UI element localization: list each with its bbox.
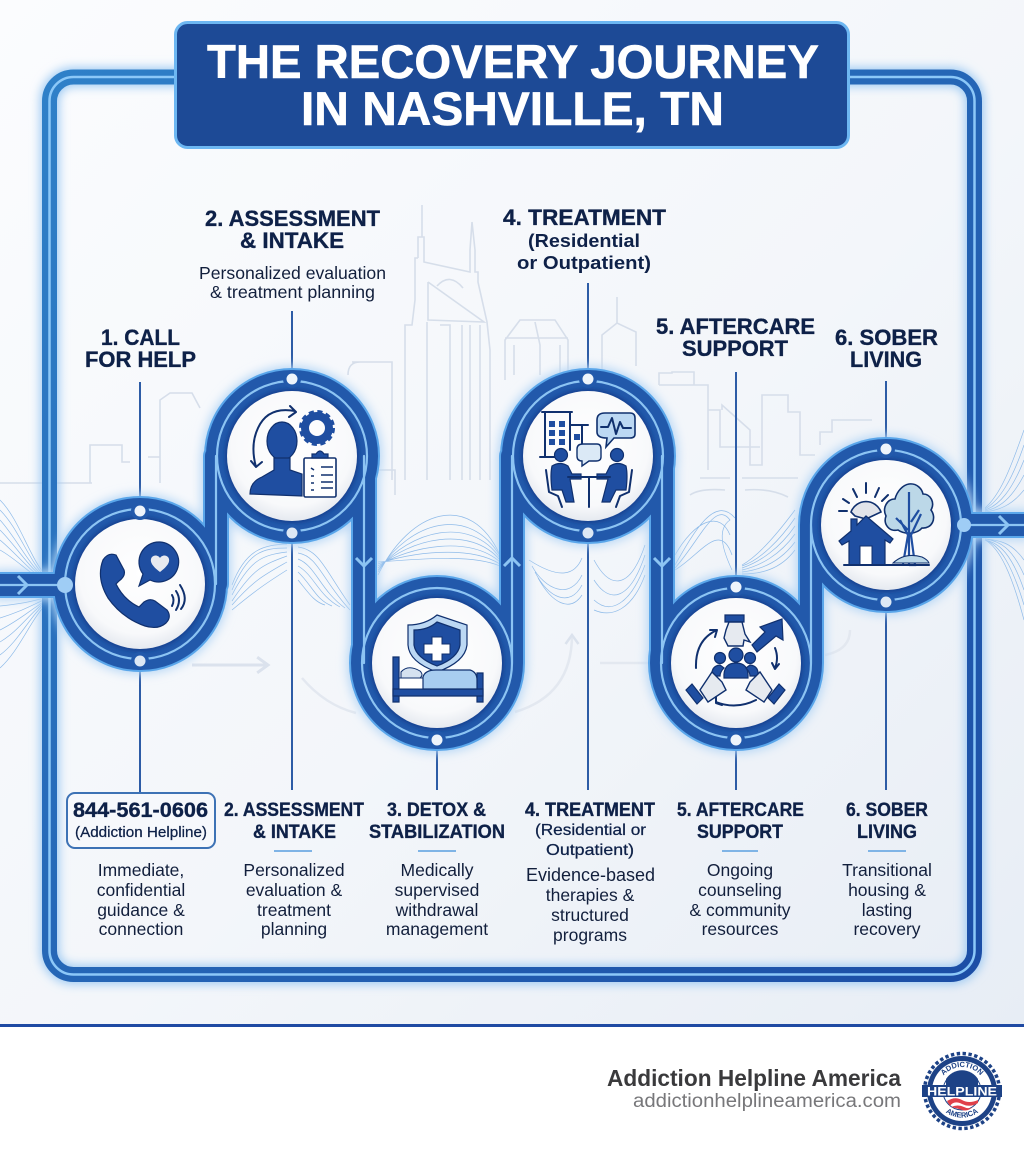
top label: step 4: or Outpatient) — [517, 252, 651, 273]
bottom column: aftercare: Ongoing — [707, 860, 773, 880]
logo badge: AMERICA — [946, 1109, 978, 1118]
footer band — [0, 1024, 1024, 1154]
step 1 medallion — [57, 502, 207, 670]
logo badge — [922, 1052, 1002, 1130]
step 3 medallion — [370, 596, 504, 749]
bottom column: treatment: structured — [551, 905, 629, 925]
faint background arrows — [192, 630, 850, 713]
top label: step 5: SUPPORT — [682, 336, 789, 361]
bottom column: treatment: (Residential or — [535, 822, 647, 839]
icon: home, tree and sun — [839, 483, 934, 565]
bottom column: treatment: Outpatient) — [546, 842, 634, 859]
top label: step 2 — [199, 206, 386, 302]
outer journey frame — [50, 77, 974, 974]
bottom column: detox — [369, 799, 505, 939]
bottom column: assessment: Personalized — [243, 860, 345, 880]
title text: THE RECOVERY JOURNEY — [207, 35, 818, 88]
bottom column: sober living: LIVING — [857, 821, 917, 843]
bottom column: assessment — [224, 799, 364, 939]
bottom column: detox: 3. DETOX & — [387, 799, 486, 821]
logo badge: HELPLINE — [927, 1084, 997, 1098]
bottom column: detox: supervised — [395, 880, 479, 900]
bottom column: sober living: 6. SOBER — [846, 799, 928, 821]
logo badge: ADDICTION — [942, 1062, 984, 1076]
bottom column: aftercare — [677, 799, 804, 939]
top label: step 4 — [503, 205, 667, 273]
top label: step 4: 4. TREATMENT — [503, 205, 667, 230]
bottom column: sober living — [842, 799, 932, 939]
top label: step 1: 1. CALL — [101, 325, 180, 350]
icon: therapy session — [540, 412, 635, 507]
bottom column: aftercare: & community — [689, 900, 791, 920]
top label: step 1: FOR HELP — [85, 347, 196, 372]
bottom column: aftercare: counseling — [698, 880, 782, 900]
step 2 medallion — [225, 370, 359, 542]
bottom column: aftercare: resources — [702, 919, 779, 939]
bottom column: treatment: therapies & — [546, 885, 635, 905]
bottom column: aftercare: SUPPORT — [697, 821, 783, 843]
bottom column: helpline: connection — [99, 919, 183, 939]
bottom column: helpline: guidance & — [97, 900, 185, 920]
phone number box: (Addiction Helpline) — [75, 824, 207, 841]
connector lines — [140, 283, 886, 792]
icon: shield over bed — [393, 615, 483, 702]
top label: step 4: (Residential — [528, 230, 640, 251]
top label: step 2: & INTAKE — [240, 228, 344, 253]
bottom column: aftercare: 5. AFTERCARE — [677, 799, 804, 821]
top label: step 2: 2. ASSESSMENT — [205, 206, 381, 231]
skyline backdrop — [0, 205, 872, 497]
bottom column: sober living: Transitional — [842, 860, 932, 880]
step 4 medallion — [521, 370, 655, 542]
top label: step 6: LIVING — [850, 347, 922, 372]
bottom column: helpline: Immediate, — [98, 860, 184, 880]
bottom column: sober living: recovery — [853, 919, 921, 939]
footer brand text: Addiction Helpline America — [607, 1065, 901, 1091]
bottom column: assessment: & INTAKE — [253, 821, 336, 843]
top label: step 2: Personalized evaluation — [199, 263, 386, 283]
bottom column: detox: management — [386, 919, 488, 939]
bottom column: sober living: housing & — [848, 880, 926, 900]
winding journey path — [0, 381, 1024, 738]
bottom column: treatment: Evidence-based — [526, 865, 655, 885]
icon: phone with heart bubble — [100, 542, 185, 627]
flowing wave mesh — [0, 430, 1024, 668]
step 5 medallion — [669, 578, 803, 749]
bottom column: assessment: 2. ASSESSMENT — [224, 799, 364, 821]
top label: step 5: 5. AFTERCARE — [656, 314, 815, 339]
phone number box: 844-561-0606 — [73, 799, 208, 822]
bottom column: assessment: planning — [261, 919, 327, 939]
bottom column: treatment — [525, 799, 655, 945]
step 6 medallion — [819, 440, 971, 611]
bottom column: helpline — [67, 793, 215, 939]
bottom column: detox: STABILIZATION — [369, 821, 505, 843]
bottom column: detox: Medically — [401, 860, 474, 880]
bottom column: sober living: lasting — [862, 900, 912, 920]
bottom column: helpline: confidential — [97, 880, 185, 900]
title text: IN NASHVILLE, TN — [301, 82, 724, 135]
top label: step 6: 6. SOBER — [835, 325, 938, 350]
bottom column: treatment: 4. TREATMENT — [525, 799, 655, 821]
icon: community support hands — [686, 615, 785, 706]
top label: step 2: & treatment planning — [210, 282, 375, 302]
phone number box — [67, 793, 215, 848]
footer brand text: addictionhelplineamerica.com — [633, 1091, 901, 1112]
title banner — [176, 22, 848, 148]
footer brand text — [607, 1065, 901, 1112]
bottom column: detox: withdrawal — [395, 900, 478, 920]
icon: person, gear, checklist — [250, 406, 336, 497]
bottom column: treatment: programs — [553, 925, 627, 945]
bottom column: assessment: evaluation & — [246, 880, 342, 900]
direction chevrons — [18, 516, 1008, 594]
bottom column: assessment: treatment — [257, 900, 331, 920]
